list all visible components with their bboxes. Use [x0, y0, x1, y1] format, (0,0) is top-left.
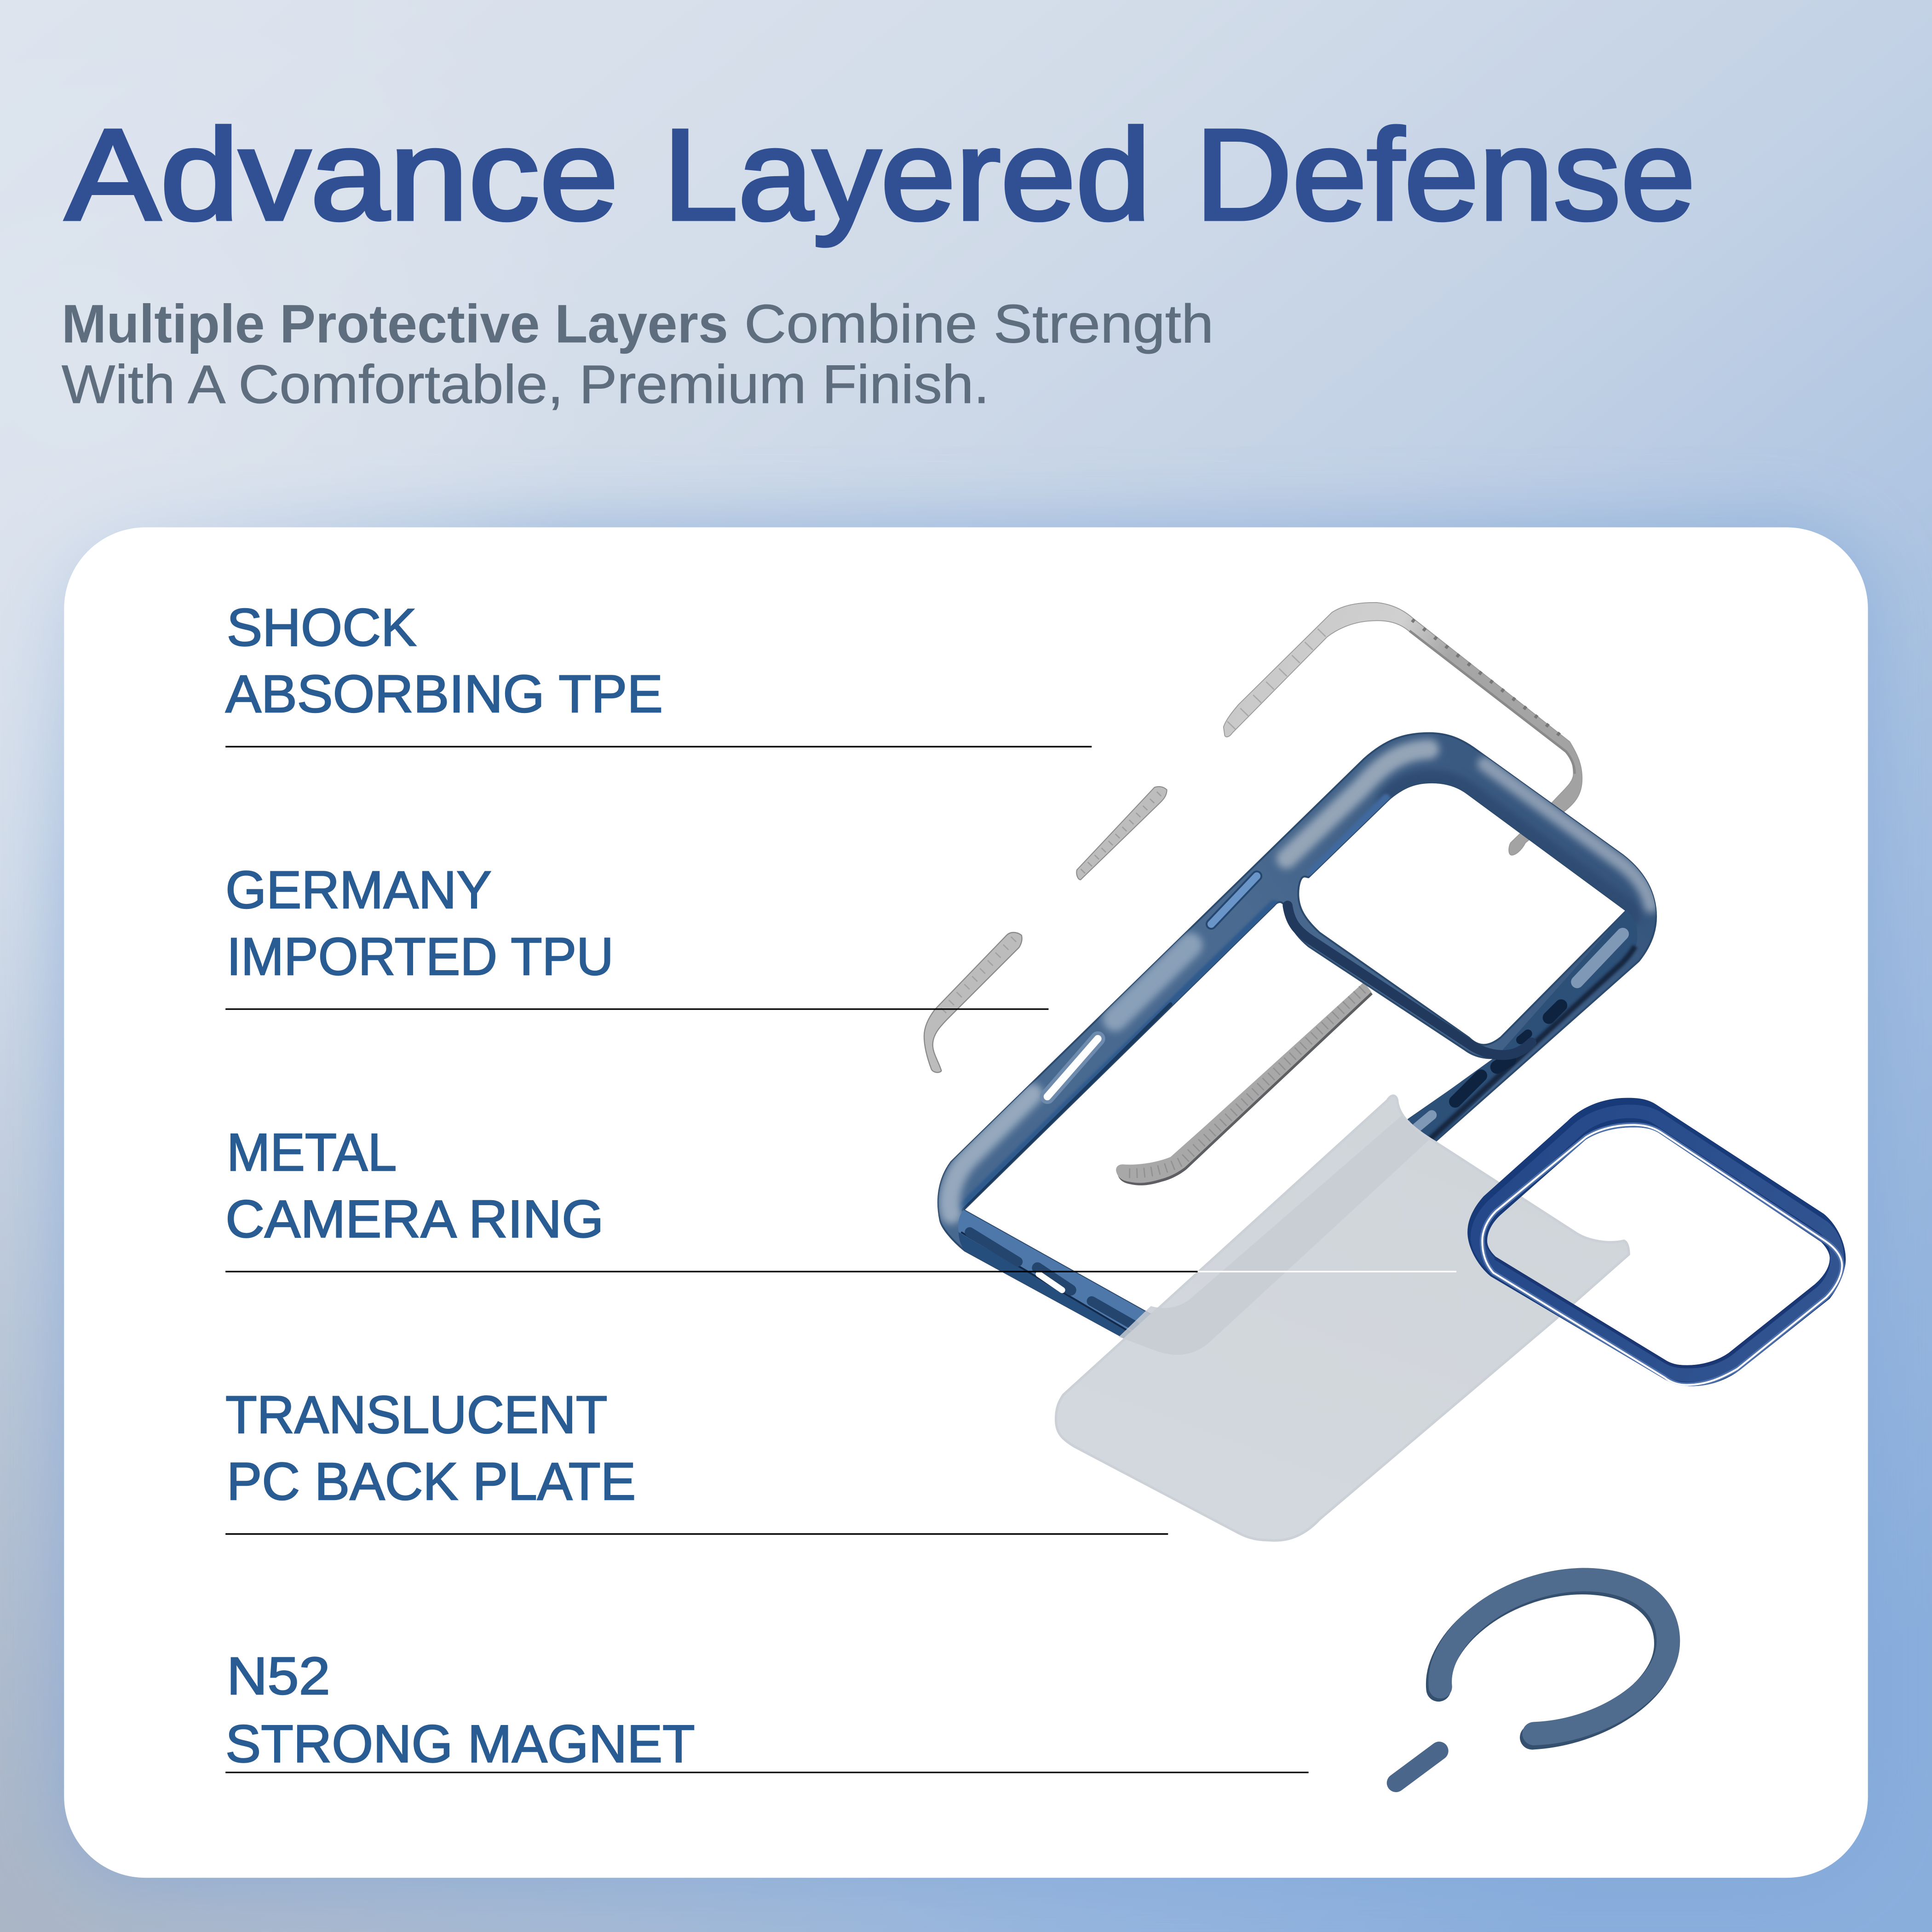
label: N52 strong magnet: STRONG MAGNET	[225, 1714, 695, 1773]
title: Layered	[663, 102, 1151, 247]
frame bottom wall	[958, 1210, 1151, 1332]
label: translucent PC back plate	[225, 1386, 636, 1511]
wall outer shade	[1429, 946, 1635, 1140]
frame highlights	[1286, 749, 1429, 859]
bottom wall opening	[1039, 1274, 1062, 1290]
frame shading	[1392, 784, 1627, 914]
frame right side wall	[1409, 910, 1638, 1158]
title: Defense	[1195, 102, 1696, 247]
icon: gray TPE strips	[924, 603, 1582, 1185]
label: translucent PC back plate: PC BACK PLATE	[227, 1452, 636, 1511]
bottom wall outer band	[959, 1232, 1130, 1338]
label: shock absorbing TPE: SHOCK	[227, 598, 416, 657]
strip: upper left	[1076, 787, 1167, 880]
label: metal camera ring	[225, 1123, 604, 1248]
frame seen through plate	[1119, 1115, 1429, 1355]
label: Germany imported TPU: GERMANY	[225, 861, 492, 920]
label: N52 strong magnet: N52	[227, 1647, 330, 1706]
label: metal camera ring: CAMERA RING	[225, 1190, 604, 1248]
label: translucent PC back plate: TRANSLUCENT	[225, 1386, 608, 1444]
side switch surround	[1047, 1039, 1098, 1097]
volume button	[1211, 876, 1257, 924]
label: Germany imported TPU	[225, 861, 614, 986]
card shadow	[64, 527, 1868, 1878]
strip: top	[1224, 603, 1582, 855]
title	[65, 102, 1696, 247]
label: Germany imported TPU: IMPORTED TPU	[227, 927, 614, 986]
volume button highlight	[1211, 876, 1257, 924]
label: metal camera ring: METAL	[227, 1123, 397, 1182]
icon: TPU bumper frame	[938, 733, 1656, 1355]
wall lower light pill	[1417, 1115, 1432, 1127]
bottom wall slots	[970, 1232, 1135, 1326]
icon: N52 magnet ring	[1396, 1580, 1668, 1783]
side switch slot	[1047, 1039, 1098, 1097]
wall highlight	[1577, 934, 1623, 982]
icon: translucent PC back plate	[1056, 1096, 1629, 1541]
icon: metal camera ring	[1467, 1098, 1846, 1386]
ring white edge	[1482, 1125, 1842, 1385]
strip ribs left	[1231, 625, 1329, 726]
strip ribs right	[1412, 620, 1569, 742]
strip: lower left	[924, 932, 1022, 1072]
magnet fragment	[1396, 1751, 1439, 1783]
label: N52 strong magnet	[225, 1647, 695, 1773]
panel: white card	[64, 527, 1868, 1878]
ring lower inner shade	[1496, 1257, 1814, 1365]
label: shock absorbing TPE	[225, 598, 663, 724]
wall port holes	[1455, 1006, 1561, 1102]
label: shock absorbing TPE: ABSORBING TPE	[225, 665, 663, 724]
strip: inner bottom	[1116, 982, 1373, 1185]
subtitle: With A Comfortable, Premium Finish.	[62, 354, 989, 414]
ring main band	[1478, 1111, 1837, 1375]
bottom wall edge line	[961, 1232, 1130, 1332]
strip dark edge	[1409, 631, 1575, 774]
title: Advance	[65, 102, 619, 247]
camera cut-out rim	[1288, 906, 1531, 1055]
divider line: lower rows	[225, 1271, 1456, 1772]
icon: divider lines	[225, 747, 1092, 1009]
subtitle: Multiple Protective Layers	[62, 293, 728, 354]
background left glow	[0, 0, 690, 937]
subtitle: Combine Strength	[744, 293, 1213, 354]
subtitle	[62, 293, 1213, 414]
ring light band	[1482, 1125, 1842, 1385]
